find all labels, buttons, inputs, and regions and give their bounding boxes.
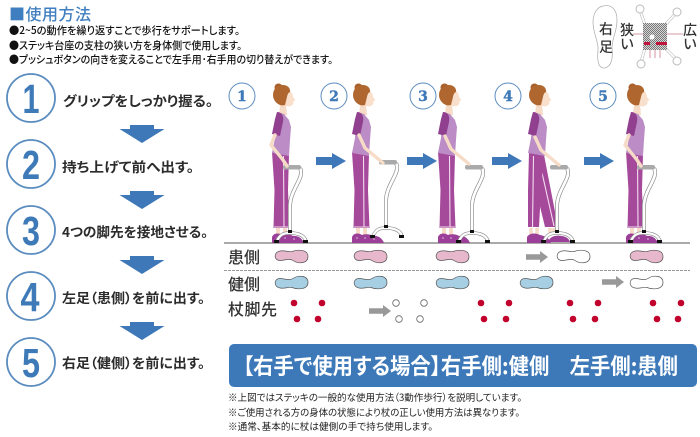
step 2 bbox=[7, 140, 194, 188]
step 2: 2 bbox=[22, 142, 40, 188]
step 1: グリップをしっかり握る。 bbox=[63, 90, 213, 110]
figure 2: 2 bbox=[329, 89, 339, 105]
step 5: 右足（健側）を前に出す。 bbox=[62, 352, 205, 372]
diagram: right foot and cane base: 狭 bbox=[620, 20, 634, 40]
step 2: 持ち上げて前へ出す。 bbox=[62, 156, 194, 176]
row: 杖脚先 bbox=[228, 296, 684, 322]
footnotes: ※通常、基本的に杖は健側の手で持ち使用します。 bbox=[228, 419, 433, 433]
footnotes: ※上図ではステッキの一般的な使用方法（3動作歩行）を説明しています。 bbox=[228, 390, 522, 404]
arrow down bbox=[120, 191, 164, 209]
diagram: right foot and cane base: 足 bbox=[599, 37, 613, 57]
step 3: 4つの脚先を接地させる。 bbox=[62, 221, 208, 241]
diagram: right foot and cane base: い bbox=[683, 34, 697, 54]
figure 4 bbox=[495, 83, 575, 243]
step 5 bbox=[7, 338, 205, 386]
usage notes: ●2~5の動作を繰り返すことで歩行をサポートします。 bbox=[9, 23, 240, 38]
arrow down bbox=[120, 322, 164, 340]
step 4: 4 bbox=[20, 274, 40, 320]
footnotes: ※ご使用される方の身体の状態により杖の正しい使用方法は異なります。 bbox=[228, 405, 520, 419]
row: 健側 bbox=[228, 271, 663, 295]
diagram: right foot and cane base: 右 bbox=[599, 19, 613, 39]
usage notes bbox=[9, 23, 333, 67]
row: 杖脚先: 杖脚先 bbox=[228, 296, 277, 320]
diagram: right foot and cane base: 広 bbox=[683, 20, 697, 40]
figure 1: 1 bbox=[237, 89, 247, 105]
row: 患側 bbox=[228, 244, 663, 268]
banner: 【右手で使用する場合】右手側:健側 左手側:患側 bbox=[243, 349, 678, 381]
row: 健側: 健側 bbox=[228, 271, 260, 295]
arrow bbox=[492, 153, 522, 169]
heading: ■使用方法 bbox=[9, 1, 91, 25]
step 4: 左足（患側）を前に出す。 bbox=[62, 287, 205, 307]
figure 1 bbox=[229, 83, 308, 243]
icon: foot outline bbox=[593, 6, 617, 68]
step 1 bbox=[7, 74, 213, 122]
figure 3: 3 bbox=[418, 89, 428, 105]
figure 5: 5 bbox=[598, 89, 608, 105]
dashed divider bbox=[224, 270, 690, 272]
figure 4: 4 bbox=[503, 89, 513, 105]
diagram: right foot and cane base: い bbox=[620, 34, 634, 54]
row: 患側: 患側 bbox=[228, 244, 260, 268]
step 5: 5 bbox=[22, 340, 40, 386]
arrow down bbox=[120, 256, 164, 274]
arrow bbox=[407, 153, 437, 169]
arrow bbox=[584, 153, 614, 169]
figure 3 bbox=[410, 83, 490, 243]
diagram: right foot and cane base bbox=[593, 5, 697, 68]
step 4 bbox=[7, 272, 205, 320]
usage notes: ●ステッキ台座の支柱の狭い方を身体側で使用します。 bbox=[9, 38, 242, 53]
figure 5 bbox=[590, 83, 662, 243]
figure 2 bbox=[321, 83, 404, 243]
step 3 bbox=[7, 206, 208, 254]
usage notes: ●プッシュボタンの向きを変えることで左手用･右手用の切り替えができます。 bbox=[9, 52, 333, 67]
ground line bbox=[224, 242, 690, 244]
arrow down bbox=[120, 125, 164, 143]
step 3: 3 bbox=[22, 208, 40, 254]
arrow bbox=[316, 153, 346, 169]
step 1: 1 bbox=[22, 76, 40, 122]
footnotes bbox=[228, 390, 522, 433]
